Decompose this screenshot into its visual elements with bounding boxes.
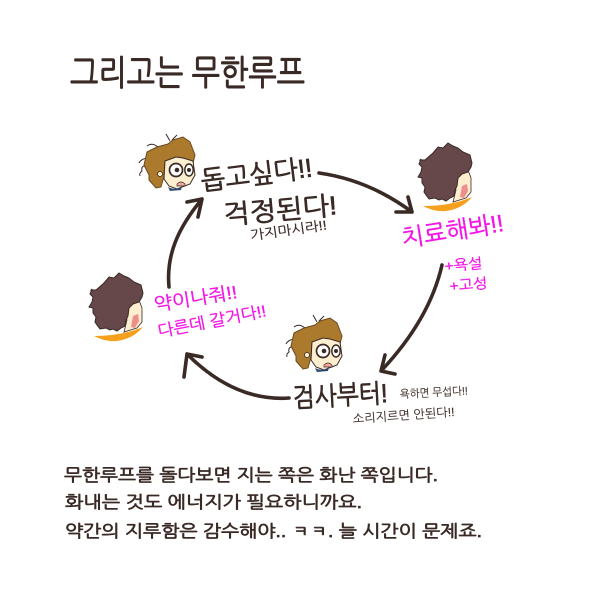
text: bottom speech: 욕하면 무섭다!! — [399, 384, 468, 401]
icon: angry patient back of head left — [89, 273, 143, 341]
text: top speech — [199, 153, 338, 243]
text: right speech: 치료해봐!! — [400, 210, 506, 253]
icon: worried parent face bottom — [286, 315, 342, 372]
text: right speech: +욕설 — [444, 255, 483, 274]
text: bottom speech — [292, 378, 468, 426]
text block: closing remarks: 화내는 것도 에너지가 필요하니까요. — [65, 493, 362, 512]
text: bottom speech: 검사부터! — [292, 378, 388, 413]
text: top speech: 돕고싶다!! — [199, 153, 314, 196]
text: left speech: 약이나줘!! — [152, 282, 239, 315]
arrow: bottom to left — [184, 354, 289, 398]
arrow: left to top — [169, 199, 202, 287]
text: top speech: 가지마시라!! — [249, 217, 328, 243]
text: right speech: +고성 — [449, 275, 488, 294]
title: 그리고는 무한루프 — [70, 54, 305, 93]
text: bottom speech: 소리지르면 안된다!! — [352, 405, 455, 426]
arrow: right to bottom — [381, 265, 442, 374]
icon: angry patient back of head right — [418, 143, 472, 211]
icon: worried parent face top — [139, 134, 195, 191]
arrow: top to right — [319, 173, 412, 212]
text: right speech — [400, 210, 506, 294]
text block: closing remarks: 약간의 지루함은 감수해야.. ㅋㅋ. 늘 시간이 문제죠. — [65, 522, 482, 541]
text: left speech: 다른데 갈거다!! — [156, 302, 268, 341]
text: left speech — [152, 282, 268, 341]
text: top speech: 걱정된다! — [222, 190, 338, 230]
text block: closing remarks — [64, 466, 482, 541]
text block: closing remarks: 무한루프를 돌다보면 지는 쪽은 화난 쪽입니다. — [64, 466, 438, 485]
